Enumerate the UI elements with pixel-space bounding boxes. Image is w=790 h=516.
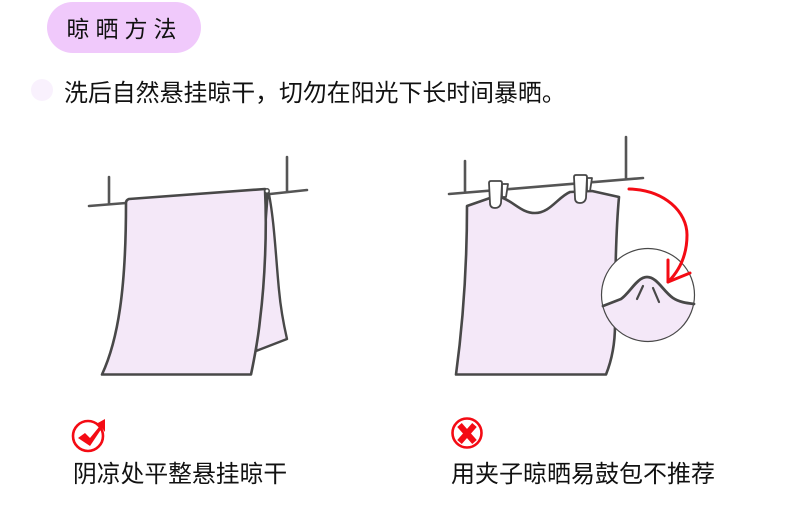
bullet dot — [31, 79, 53, 101]
heading pill — [47, 2, 201, 53]
icon: red cross — [452, 418, 482, 448]
red arrow — [629, 189, 690, 282]
clip right — [574, 175, 592, 203]
caption left: 阴凉处平整悬挂晾干 — [73, 461, 287, 488]
caption right: 用夹子晾晒易鼓包不推荐 — [451, 461, 715, 488]
detail magnifier circle — [602, 248, 694, 342]
illustration: towel hung flat — [89, 157, 307, 374]
instruction text: 洗后自然悬挂晾干，切勿在阳光下长时间暴晒。 — [64, 80, 566, 107]
illustration: shirt hung with clips — [449, 137, 643, 374]
heading text: 晾晒方法 — [66, 16, 182, 42]
clip left — [489, 181, 508, 208]
icon: red check — [73, 419, 105, 451]
